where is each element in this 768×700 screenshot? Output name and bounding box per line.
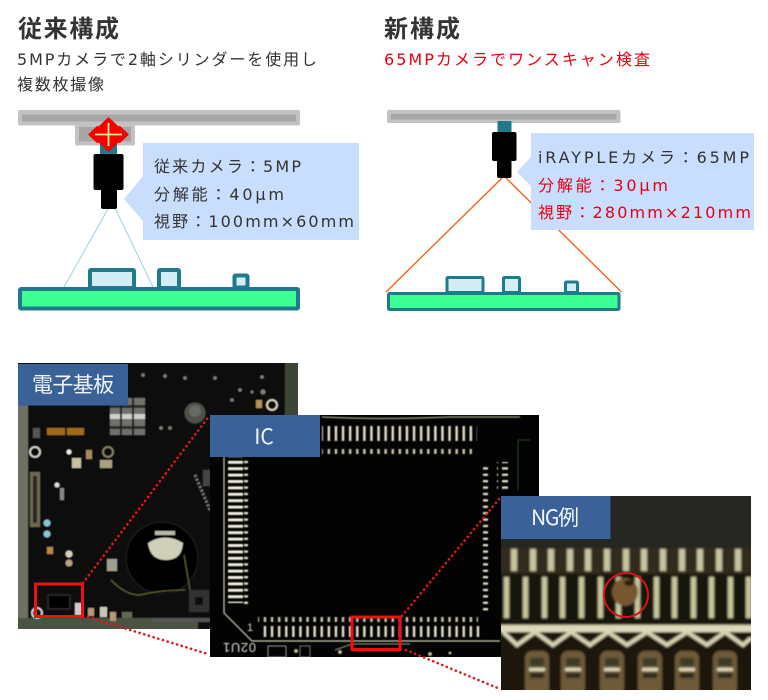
components [90,270,248,288]
text block: new description: 65MPカメラでワンスキャン検査 [384,50,650,69]
callout: new specs [517,133,754,230]
camera mount [100,140,117,155]
defect marker circle [604,573,648,617]
text block: conventional description: 5MPカメラで2軸シリンダーを使用し [17,50,317,69]
icon: red four-way arrow [88,117,129,152]
label: circuit board: 電子基板 [32,369,114,399]
label: NG example: NG例 [531,502,579,532]
photo: IC close-up: 1 [247,622,253,634]
board [20,289,298,308]
camera mount [498,121,512,133]
callout: new specs: 分解能：30μm [538,176,668,195]
callout: conventional specs: 視野：100mm×60mm [154,212,354,231]
label: NG example [501,496,610,539]
photo: NG example close-up [501,496,751,690]
photo: IC close-up: 02U1 [223,640,256,655]
photo: circuit board [18,363,298,629]
text block: conventional description [17,50,317,94]
board [388,294,619,310]
field of view lines [386,178,622,292]
dotted zoom lines [83,415,500,689]
callout: conventional specs: 分解能：40μm [154,185,284,204]
callout: new specs: iRAYPLEカメラ：65MP [538,148,749,167]
heading: new configuration: 新構成 [384,16,460,43]
diagram: new camera rig [386,110,622,310]
label: IC [210,415,320,457]
field of view lines [64,209,153,287]
callout: new specs: 視野：280mm×210mm [538,203,751,222]
components [447,278,578,292]
inspection area marker [352,617,400,650]
camera body [492,132,516,178]
rail [18,110,300,126]
callout: conventional specs: 従来カメラ：5MP [154,157,301,176]
panel: new configuration [384,16,754,310]
cylinder slider [75,125,135,146]
label: IC: IC [254,421,274,451]
rail [387,110,620,123]
camera body [94,154,124,209]
panel: conventional configuration [17,16,359,308]
text block: conventional description: 複数枚撮像 [17,75,104,94]
diagram: conventional camera rig [18,110,300,308]
inspection area marker [36,584,82,616]
photo: IC close-up [210,415,539,657]
heading: conventional configuration: 従来構成 [18,16,119,43]
label: circuit board [18,364,128,406]
callout: conventional specs [124,143,359,240]
